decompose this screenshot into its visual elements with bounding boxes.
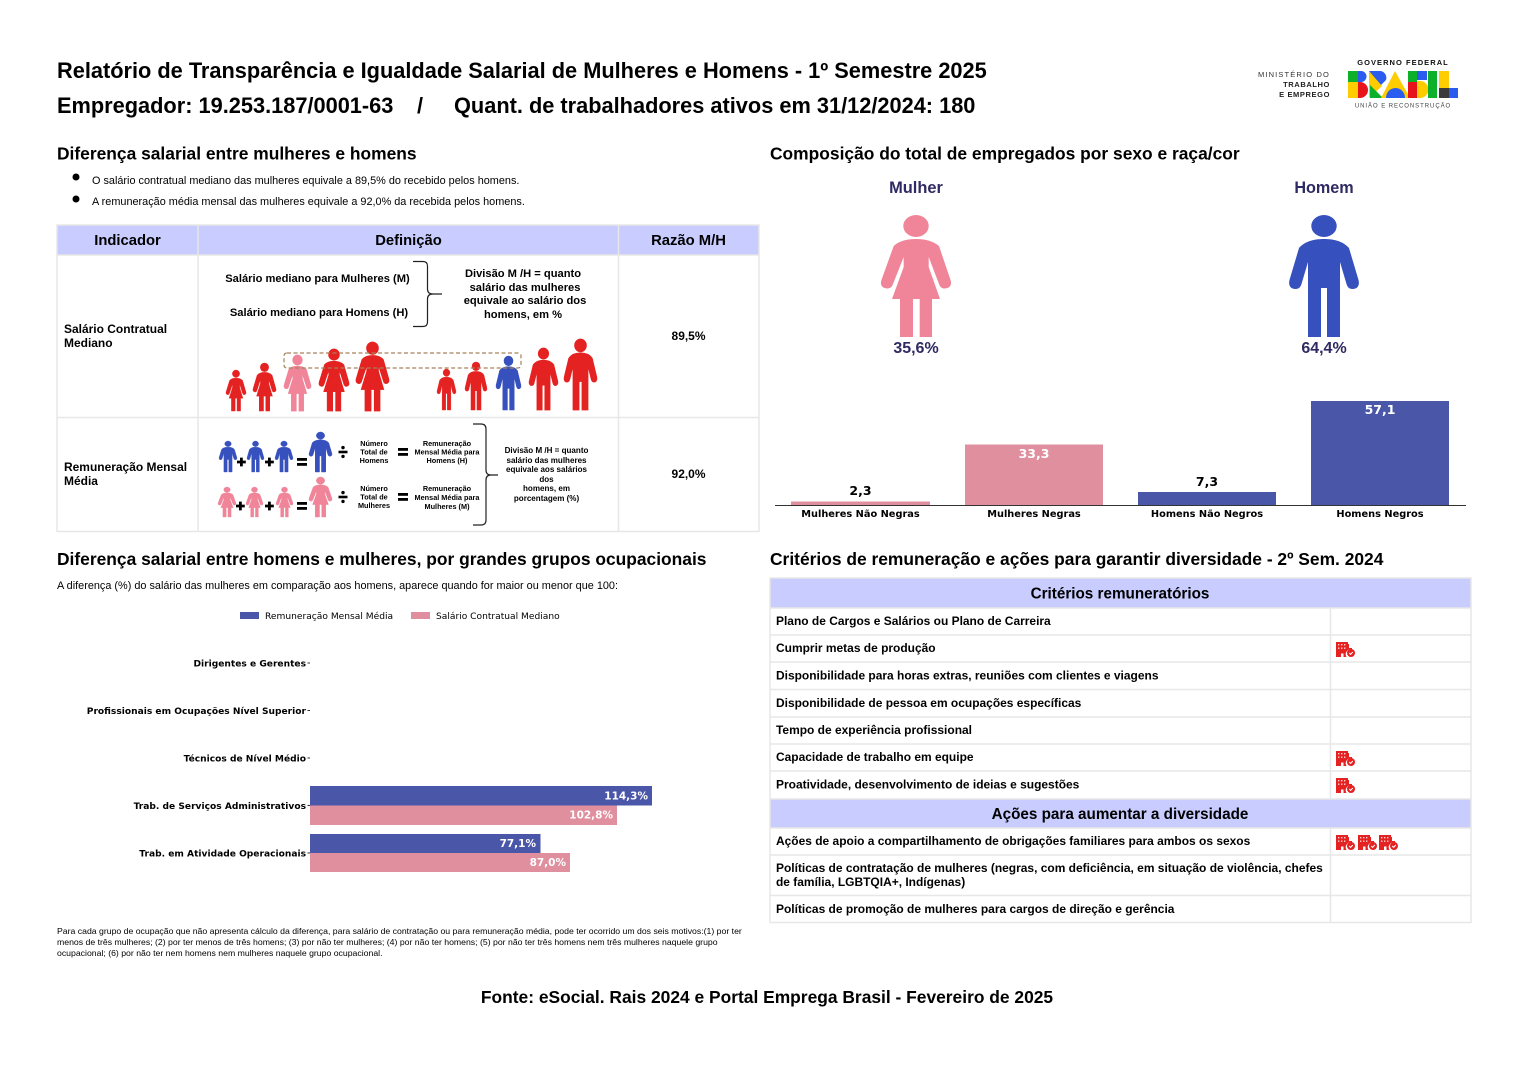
bar chart: composição por sexo e raça: Mulheres Negras [987, 509, 1081, 520]
footnote: Para cada grupo de ocupação que não apresenta cálculo da diferença, para salário de contratação ou para remuneração média, pode ter ocorrido um dos seis motivos:(1) por ter [57, 926, 742, 936]
definition text: Divisão M /H = quanto [505, 446, 588, 455]
criteria rows [776, 614, 1159, 792]
bar chart: grupos ocupacionais: Dirigentes e Gerentes [193, 660, 306, 670]
footnote: menos de três mulheres; (2) por ter menos de três homens; (3) por não ter mulheres; (4) por não ter homens; (5) por não ter três homens nem três mulheres naquele grupo [57, 937, 718, 947]
subtitle: A diferença (%) do salário das mulheres em comparação aos homens, aparece quando for maior ou menor que 100: [57, 580, 618, 592]
bar chart: composição por sexo e raça: 2,3 [849, 483, 872, 498]
heading: diferença salarial: Diferença salarial entre mulheres e homens [57, 144, 417, 164]
row: salário contratual mediano [64, 262, 706, 411]
definition text: homens, em [523, 484, 570, 493]
formula: men: Número [360, 439, 388, 448]
action rows: Ações de apoio a compartilhamento de obrigações familiares para ambos os sexos [776, 834, 1251, 848]
section header: ações: Ações para aumentar a diversidade [992, 806, 1248, 823]
definition text: Divisão M /H = quanto [465, 268, 581, 280]
definition text: equivale aos salários [506, 465, 588, 474]
logo: Ministério do Trabalho e Emprego: MINISTÉRIO DO [1258, 70, 1330, 79]
bar chart: composição por sexo e raça: Homens Negros [1336, 509, 1424, 520]
formula: men: Mensal Média para [415, 448, 480, 456]
definition text: salário das mulheres [506, 456, 587, 465]
bar chart: composição por sexo e raça: Mulheres Não Negras [801, 509, 920, 520]
criteria rows: Proatividade, desenvolvimento de ideias e sugestões [776, 778, 1080, 792]
pictogram: mulher: 35,6% [893, 340, 939, 357]
bar chart: composição por sexo e raça: 33,3 [1019, 446, 1049, 461]
bar chart: grupos ocupacionais: 87,0% [530, 857, 566, 869]
logo: Ministério do Trabalho e Emprego [1258, 70, 1330, 99]
formula: men: Remuneração [423, 439, 472, 448]
logo: Ministério do Trabalho e Emprego: TRABALHO [1283, 80, 1330, 89]
brace [473, 424, 498, 525]
title: Empregador: 19.253.187/0001-63 [57, 93, 393, 118]
row: salário contratual mediano: Mediano [64, 336, 113, 350]
heading: grupos ocupacionais: Diferença salarial entre homens e mulheres, por grandes grupos ocupacionais [57, 549, 706, 569]
title: Quant. de trabalhadores ativos em 31/12/2024: 180 [454, 93, 975, 118]
definition text [464, 268, 586, 321]
pictogram: homem [1289, 179, 1359, 357]
bar chart: grupos ocupacionais [87, 660, 652, 872]
formula: women [218, 477, 480, 517]
criteria rows: Capacidade de trabalho em equipe [776, 750, 974, 764]
brace [413, 262, 442, 326]
formula: women: Mulheres (M) [424, 502, 470, 511]
action rows: Políticas de contratação de mulheres (negras, com deficiência, em situação de violência, chefes [776, 861, 1323, 875]
legend: Remuneração Mensal Média [265, 611, 393, 622]
row: salário contratual mediano: Salário Contratual [64, 322, 167, 336]
footnote: ocupacional; (6) por não ter nem homens nem mulheres naquele grupo ocupacional. [57, 948, 382, 958]
criteria rows: Tempo de experiência profissional [776, 723, 972, 737]
icons: building markers [1336, 642, 1398, 850]
formula: women: Mensal Média para [415, 493, 480, 502]
pictogram: homem: Homem [1294, 179, 1354, 197]
formula: women: Remuneração [423, 484, 472, 493]
row: remuneração mensal média: Média [64, 474, 98, 488]
row: remuneração mensal média: 92,0% [672, 467, 706, 481]
action rows [776, 834, 1323, 916]
footnote [57, 926, 742, 958]
criteria rows: Disponibilidade para horas extras, reuniões com clientes e viagens [776, 668, 1159, 682]
bullet list: A remuneração média mensal das mulheres equivale a 92,0% da recebida pelos homens. [92, 196, 525, 208]
legend: Salário Contratual Mediano [436, 612, 560, 622]
bar chart: composição por sexo e raça: 7,3 [1196, 474, 1218, 489]
row: salário contratual mediano: 89,5% [672, 329, 706, 343]
formula: men: Total de [360, 448, 388, 456]
section header: critérios remuneratórios: Critérios remuneratórios [1031, 586, 1209, 602]
icon row: median women and men [226, 339, 597, 411]
table header: Indicador [94, 233, 161, 249]
heading: critérios: Critérios de remuneração e ações para garantir diversidade - 2º Sem. 2024 [770, 549, 1384, 569]
bullet list: O salário contratual mediano das mulheres equivale a 89,5% do recebido pelos homens. [92, 175, 519, 187]
panel: indicator table [57, 225, 759, 532]
formula: men: Homens [360, 456, 388, 465]
logo: Governo Federal Brasil: GOVERNO FEDERAL [1357, 58, 1449, 67]
criteria rows: Disponibilidade de pessoa em ocupações específicas [776, 696, 1082, 710]
table header: Razão M/H [651, 233, 726, 249]
formula: women: Total de [360, 492, 388, 502]
bar chart: grupos ocupacionais: 114,3% [604, 790, 648, 802]
pictogram: mulher [881, 179, 951, 357]
action rows: Políticas de promoção de mulheres para cargos de direção e gerência [776, 902, 1175, 916]
pictogram: mulher: Mulher [889, 179, 943, 197]
title: / [417, 93, 423, 118]
bar chart: composição por sexo e raça: 57,1 [1365, 402, 1395, 417]
pictogram: homem: 64,4% [1301, 340, 1347, 357]
logo: Ministério do Trabalho e Emprego: E EMPREGO [1279, 90, 1330, 99]
heading: composição: Composição do total de empregados por sexo e raça/cor [770, 144, 1240, 164]
row: salário contratual mediano: Salário mediano para Mulheres (M) [225, 273, 410, 285]
row: salário contratual mediano: Salário mediano para Homens (H) [230, 307, 408, 319]
title: Relatório de Transparência e Igualdade Salarial de Mulheres e Homens - 1º Semestre 2025 [57, 58, 987, 83]
formula: men [219, 432, 480, 472]
row: remuneração mensal média [64, 424, 706, 525]
bar chart: grupos ocupacionais: Técnicos de Nível Médio [184, 754, 306, 764]
bar chart: grupos ocupacionais: Trab. de Serviços Administrativos [134, 802, 306, 812]
formula: men: Homens (H) [427, 456, 468, 465]
definition text: dos [539, 475, 554, 484]
title [57, 58, 987, 118]
formula: women: Mulheres [358, 501, 390, 510]
table header: Definição [375, 233, 442, 249]
table header [57, 225, 759, 255]
panel: criteria table [770, 578, 1471, 922]
row: remuneração mensal média: Remuneração Mensal [64, 460, 187, 474]
source: Fonte: eSocial. Rais 2024 e Portal Emprega Brasil - Fevereiro de 2025 [481, 987, 1053, 1007]
bar chart: composição por sexo e raça: Homens Não Negros [1151, 509, 1263, 520]
bar chart: composição por sexo e raça [775, 401, 1466, 520]
bar chart: grupos ocupacionais: Profissionais em Ocupações Nível Superior [87, 707, 307, 717]
legend [240, 611, 560, 622]
logo: Governo Federal Brasil: UNIÃO E RECONSTRUÇÃO [1355, 102, 1451, 110]
definition text: equivale ao salário dos [464, 295, 586, 307]
definition text: porcentagem (%) [514, 494, 579, 503]
bar chart: grupos ocupacionais: Trab. em Atividade Operacionais [139, 850, 306, 860]
bullet list [72, 174, 525, 208]
formula: women: Número [360, 484, 388, 493]
criteria rows: Cumprir metas de produção [776, 641, 936, 655]
bar chart: grupos ocupacionais: 77,1% [500, 838, 536, 850]
definition text [505, 446, 588, 503]
definition text: salário das mulheres [470, 282, 580, 294]
bar chart: grupos ocupacionais: 102,8% [569, 810, 613, 822]
definition text: homens, em % [484, 309, 562, 321]
action rows: de família, LGBTQIA+, Indígenas) [776, 875, 965, 889]
criteria rows: Plano de Cargos e Salários ou Plano de Carreira [776, 614, 1051, 628]
logo: Governo Federal Brasil [1348, 58, 1458, 110]
